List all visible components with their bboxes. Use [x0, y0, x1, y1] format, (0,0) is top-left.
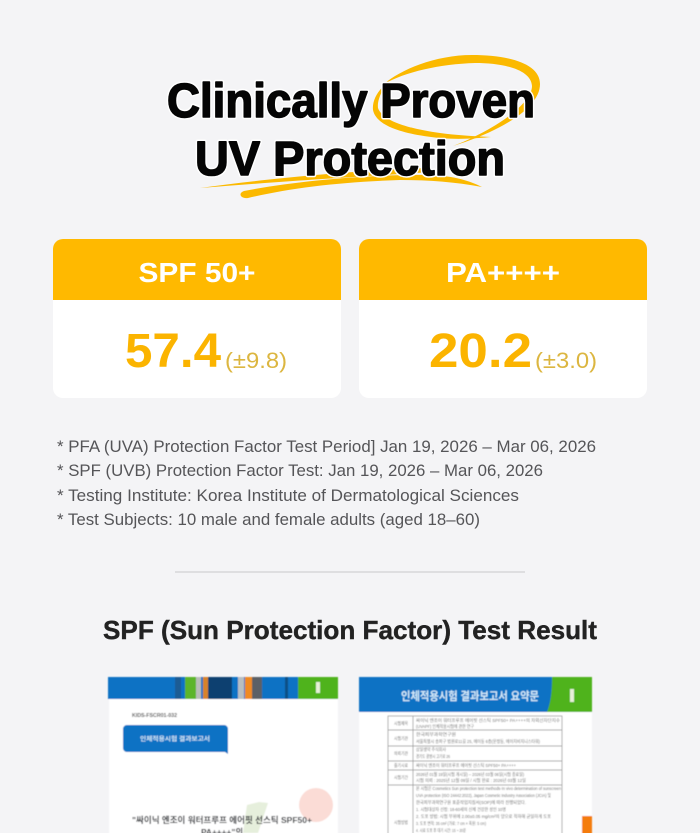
summary table text: 시험 의뢰 : 2025년 12월 09일 / 시험 완료 : 2026년 03월 12일 — [416, 777, 526, 784]
section heading: SPF (Sun Protection Factor) Test Result — [103, 615, 597, 645]
title block — [167, 55, 540, 198]
summary table text: 싸이닉 엔조이 워터프루프 에어핏 선스틱 SPF50+ PA++++ — [416, 762, 516, 769]
title text: Clinically Proven — [167, 75, 535, 128]
summary table text: 서울특별시 송파구 법원로11길 25, 에이동 6층(문정동, 에이치비지니스타워) — [416, 738, 540, 745]
SPF value — [125, 325, 287, 378]
summary table text: 3. 도포 면적: 35 cm² (가로: 7 cm × 폭원: 5 cm) — [416, 820, 486, 827]
report code: KIDS-FSCR01-032 — [132, 713, 177, 719]
orange page marker — [582, 816, 592, 833]
scribble: underline — [200, 168, 482, 198]
summary table text: 삼일생약 주식회사 — [416, 746, 447, 753]
cover product title: "싸이닉 엔조이 워터프루프 에어핏 선스틱 SPF50+ — [132, 815, 312, 825]
summary table text: 4. 시료 도포 후 대기 시간: 15 ~ 20분 — [416, 827, 466, 833]
summary table text: 의뢰기관 — [394, 750, 408, 757]
test details notes: * PFA (UVA) Protection Factor Test Period] Jan 19, 2026 – Mar 06, 2026 — [57, 438, 596, 456]
summary table text: (UVAPF) 인체적용시험에 관한 연구 — [416, 723, 474, 730]
cover title tab: 인체적용시험 결과보고서 — [140, 735, 210, 743]
test details notes: * Test Subjects: 10 male and female adults (aged 18–60) — [57, 511, 480, 529]
scribble: circle around Proven — [373, 55, 540, 146]
summary table — [388, 716, 562, 833]
title text: UV Protection — [195, 133, 505, 186]
summary table text: 줄기시료 — [394, 762, 408, 769]
test details notes: * SPF (UVB) Protection Factor Test: Jan 19, 2026 – Mar 06, 2026 — [57, 462, 543, 480]
summary table text: 싸이닉 엔조이 워터프루프 에어핏 선스틱 SPF50+ PA++++의 자외선차단지수 — [416, 717, 560, 724]
title text — [167, 75, 535, 186]
summary table text: 1. 시험대상자 선정: 18-60세의 신체 건강한 성인 10명 — [416, 806, 506, 813]
cover product title — [132, 815, 312, 833]
summary table text: 2. 도포 방법: 시험 부위에 2.00±0.05 mg/cm²의 양으로 적하해 균일하게 도포 — [416, 813, 551, 820]
report cover page — [108, 677, 338, 833]
summary header — [359, 677, 592, 712]
summary table text: 2026년 01월 19일(시험 개시일) – 2026년 03월 06일(시험 종료일) — [416, 771, 524, 778]
summary table text: 시험기간 — [394, 774, 408, 781]
decorative shapes — [299, 788, 333, 822]
panel header: SPF 50+ — [53, 239, 341, 300]
SPF value: 57.4 — [125, 325, 221, 378]
panel header: SPF 50+: SPF 50+ — [138, 257, 256, 288]
PA value: (±3.0) — [535, 348, 597, 373]
summary table text: 한국피부과학연구원 — [416, 731, 456, 738]
summary table text: 경기도 광명시 고기로 26 — [416, 753, 450, 760]
summary table text: 시험기관 — [394, 735, 408, 742]
panel header: PA++++ — [359, 239, 647, 300]
summary table text: 한국피부과학연구원 표준작업지침서(SOP)에 따라 진행되었다. — [416, 799, 526, 806]
panel: PA++++ — [359, 239, 647, 398]
summary table text: 본 시험은 Cosmetics Sun protection test methods-In vivo determination of sunscreen — [416, 786, 561, 791]
cover title tab — [123, 725, 228, 754]
panel: SPF 50+ — [53, 239, 341, 398]
cover header colour band — [108, 677, 338, 699]
summary table text: 시험제목 — [394, 720, 408, 727]
report summary page — [359, 677, 592, 833]
PA value: 20.2 — [429, 325, 532, 378]
panel header: PA++++: PA++++ — [446, 257, 560, 288]
title text: Clinically Proven — [167, 75, 535, 128]
summary table text: 시험방법 — [394, 819, 408, 825]
PA value — [429, 325, 597, 378]
test details notes — [57, 438, 596, 529]
summary header: 인체적용시험 결과보고서 요약문 — [401, 689, 539, 703]
summary table text — [394, 717, 561, 833]
test details notes: * Testing Institute: Korea Institute of Dermatological Sciences — [57, 487, 519, 505]
SPF value: (±9.8) — [225, 348, 287, 373]
summary table text: UVA protection (ISO 24442:2022), Japan Cosmetic Industry Association (JCIA) 및 — [416, 792, 551, 799]
title text: UV Protection — [195, 133, 505, 186]
